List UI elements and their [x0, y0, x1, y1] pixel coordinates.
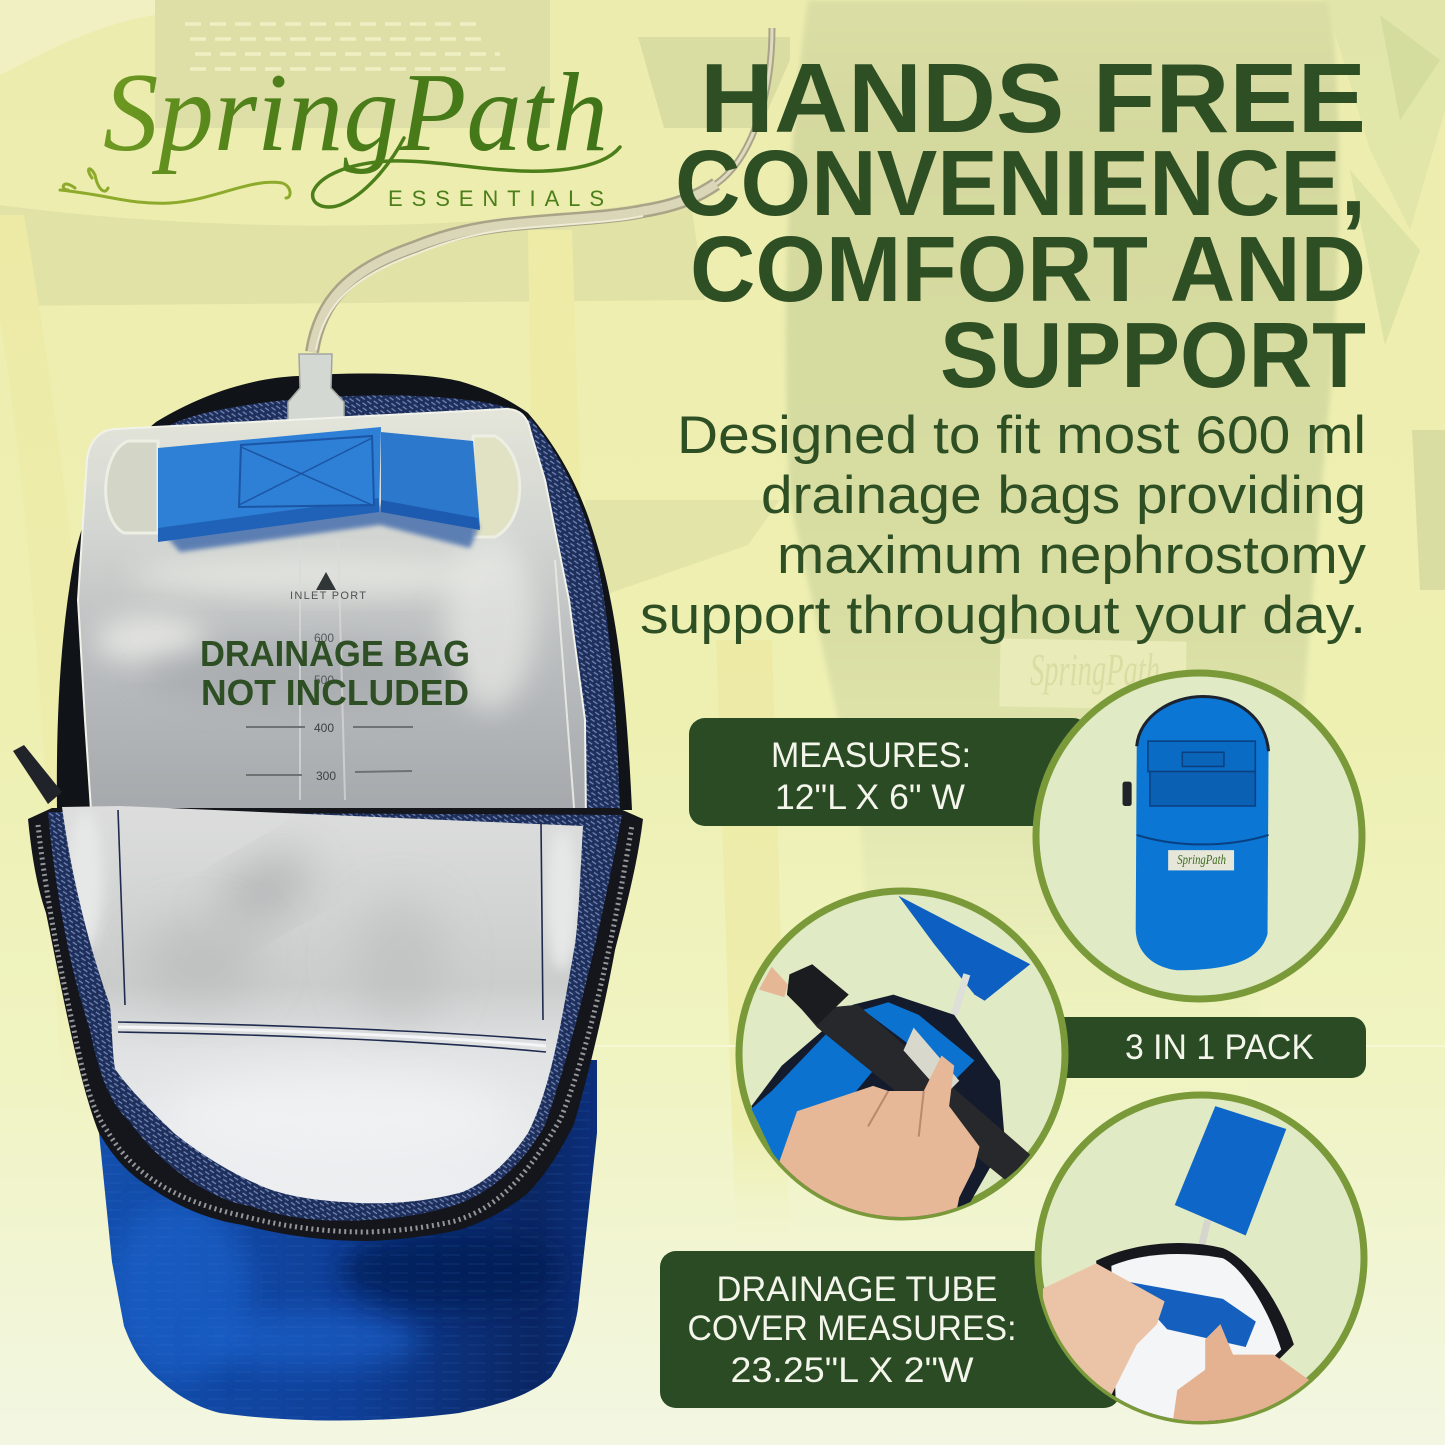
pouch	[1096, 1243, 1294, 1431]
left hand	[1043, 1263, 1165, 1400]
callout: drainage tube cover measures: 23.25"L X 2"W	[730, 1351, 974, 1390]
callout: 3 in 1 pack: 3 IN 1 PACK	[1125, 1028, 1314, 1067]
logo: SpringPath Essentials	[60, 51, 620, 211]
callout: measures: 12"L X 6" W	[775, 778, 965, 817]
clear drainage bag	[78, 409, 586, 825]
right hand	[1173, 1324, 1309, 1421]
bag hanger holes	[106, 441, 158, 533]
lower blue pouch body	[90, 1050, 610, 1430]
blue velcro strap, left	[158, 427, 381, 542]
zipper teeth	[38, 825, 632, 1232]
tube cover	[898, 896, 1030, 1001]
pouch inner lining edge	[520, 418, 620, 812]
drainage tube	[312, 28, 772, 352]
photo circle: strap and buckle	[739, 891, 1065, 1223]
description text: drainage bags providing	[761, 466, 1366, 525]
callout: drainage tube cover measures: DRAINAGE TUBE	[716, 1270, 998, 1309]
strap shadow	[165, 505, 480, 552]
callout: drainage tube cover measures	[660, 1251, 1120, 1408]
heading: hands free convenience, comfort and support: HANDS FREE	[700, 43, 1366, 153]
description text: support throughout your day.	[640, 586, 1366, 645]
heading: hands free convenience, comfort and support: SUPPORT	[940, 303, 1366, 407]
photo circle: pouch front: SpringPath	[1177, 852, 1226, 867]
blue velcro strap, right	[381, 432, 480, 530]
description text: maximum nephrostomy	[777, 526, 1367, 585]
photo circle: pouch front	[1036, 673, 1362, 999]
strap	[802, 1005, 1033, 1180]
label: drainage bag not included	[200, 633, 470, 713]
bag markings	[246, 572, 413, 783]
buckle	[787, 964, 849, 1025]
drainage bag connector	[288, 354, 344, 430]
velcro strap	[1124, 1281, 1256, 1347]
tube cover	[1175, 1106, 1286, 1235]
zipper pull	[13, 745, 62, 804]
callout: 3 in 1 pack	[1030, 1017, 1366, 1078]
label: drainage bag not included: NOT INCLUDED	[201, 672, 469, 713]
callout: measures: MEASURES:	[771, 736, 971, 775]
label tag	[904, 1028, 959, 1096]
pouch velcro panels	[1148, 741, 1255, 772]
callout: measures	[689, 718, 1089, 826]
pouch label	[1168, 850, 1234, 870]
white inner liner flap	[62, 806, 583, 1203]
lower zipper band	[28, 808, 643, 1241]
pouch back shell	[57, 373, 632, 810]
callout: drainage tube cover measures: COVER MEASURES:	[688, 1309, 1016, 1348]
tube	[1198, 1220, 1211, 1245]
liner stitching	[118, 810, 546, 1052]
bag markings: 300	[316, 769, 336, 783]
bag markings: 600	[314, 631, 334, 645]
heading: hands free convenience, comfort and support: COMFORT AND	[690, 217, 1366, 321]
logo sprig	[60, 169, 290, 203]
bag markings: 500	[314, 673, 334, 687]
liner shading	[67, 810, 578, 1170]
photo circle: tube cover in pouch	[1038, 1095, 1364, 1433]
fingers and hand	[759, 967, 788, 997]
logo wordmark: SpringPath	[103, 51, 608, 175]
label: drainage bag not included: DRAINAGE BAG	[200, 633, 470, 674]
pouch zipper pull	[1123, 782, 1132, 806]
description text: Designed to fit most 600 ml	[677, 406, 1366, 465]
background scene: SpringPath	[1030, 644, 1160, 695]
bag highlights	[95, 530, 575, 820]
knit lining border	[48, 812, 622, 1221]
bag markings: INLET PORT	[290, 590, 366, 602]
logo flourish	[313, 138, 620, 207]
description text	[640, 406, 1367, 645]
product: open drainage bag pouch	[13, 354, 643, 1430]
heading: hands free convenience, comfort and support	[675, 43, 1366, 407]
pouch	[751, 995, 1005, 1223]
bag markings: 400	[314, 721, 334, 735]
logo subtitle: ESSENTIALS	[388, 186, 604, 211]
pouch body	[1136, 697, 1269, 970]
heading: hands free convenience, comfort and support: CONVENIENCE,	[675, 131, 1366, 235]
